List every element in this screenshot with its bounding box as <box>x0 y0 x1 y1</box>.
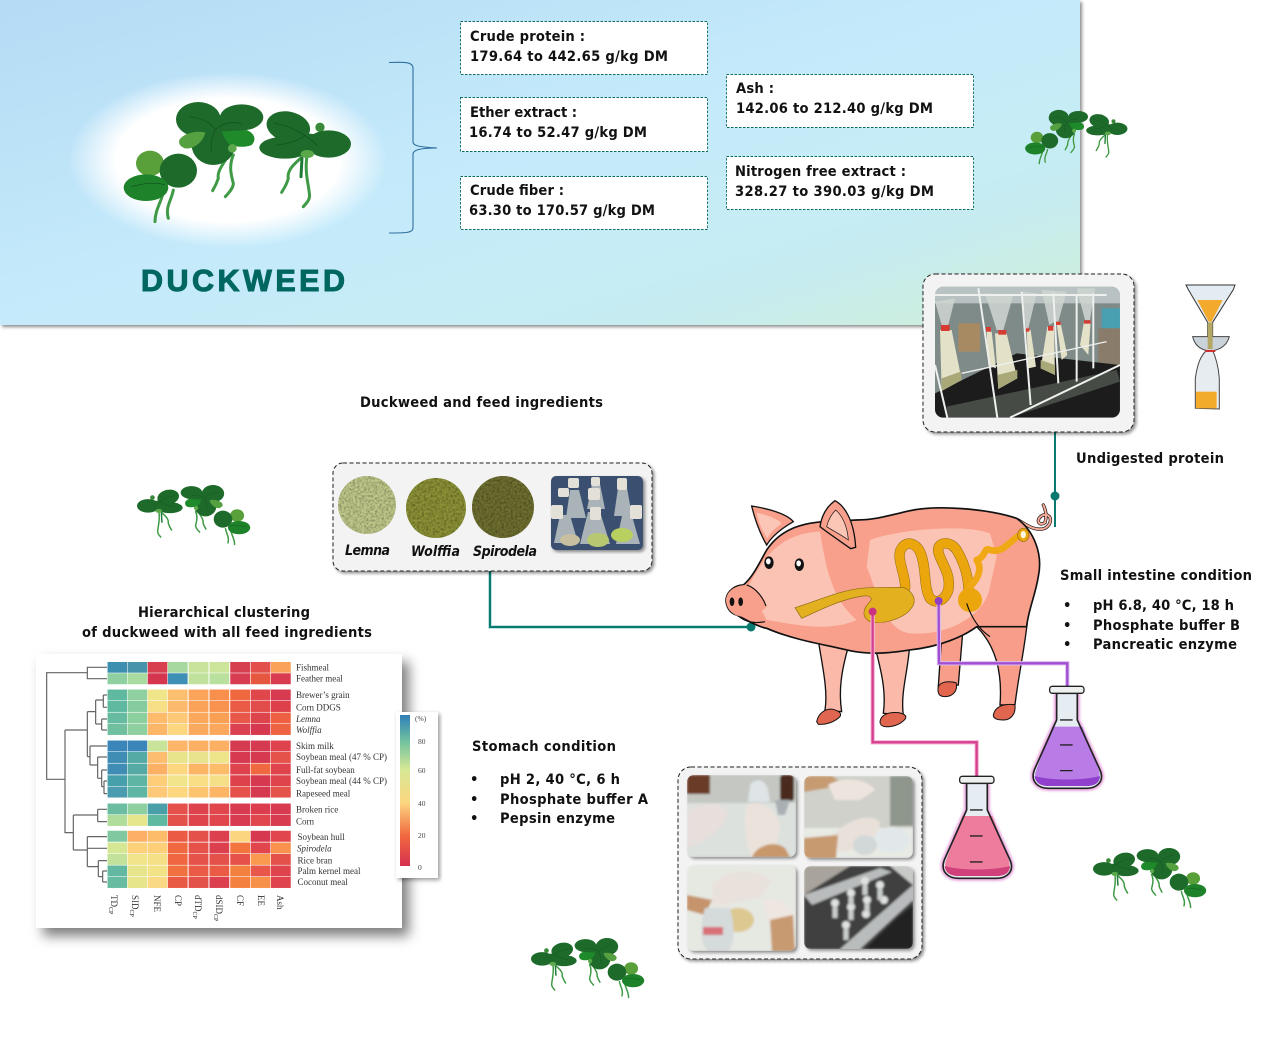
photo 4 <box>804 866 913 949</box>
heatmap column labels: dTD <box>193 895 203 912</box>
second front leg <box>875 637 910 715</box>
heatmap legend: 20 <box>418 831 426 840</box>
heatmap card <box>36 654 402 928</box>
heatmap legend <box>396 712 438 878</box>
sample: Lemna: Lemna <box>345 543 390 559</box>
connector: ingredients to pig <box>490 571 756 632</box>
heatmap legend: 0 <box>418 863 422 872</box>
stomach condition text: • <box>470 791 478 808</box>
ear right <box>820 501 856 549</box>
icon: large duckweed <box>124 102 351 222</box>
heatmap legend: (%) <box>415 714 427 723</box>
heatmap column labels: SID <box>130 895 140 910</box>
heatmap legend: 60 <box>418 766 426 775</box>
composition box: crude protein: 179.64 to 442.65 g/kg DM <box>470 48 668 65</box>
photo 1 <box>687 775 796 857</box>
photo 3 <box>687 865 796 951</box>
small intestine condition text: • <box>1063 636 1071 653</box>
stomach condition text: Stomach condition <box>472 738 616 755</box>
small intestine condition text <box>1060 567 1252 653</box>
icon: small duckweed left <box>137 485 250 545</box>
heatmap row labels: Soybean meal (44 % CP) <box>296 776 387 786</box>
heading: hierarchical clustering <box>82 604 372 641</box>
photo: nylon bags in tank <box>935 287 1120 418</box>
stomach connector to pink flask <box>869 608 977 777</box>
heatmap row labels: Feather meal <box>296 674 343 684</box>
head highlight <box>747 532 857 627</box>
heatmap column labels: dSID <box>214 895 224 914</box>
heatmap column labels <box>107 895 285 922</box>
heatmap column labels: CP <box>212 914 218 922</box>
small intestine connector to purple flask <box>935 597 1067 687</box>
heatmap row labels: Soybean hull <box>298 832 345 842</box>
composition box: ash: Ash : <box>736 80 774 97</box>
composition box: crude fiber: Crude fiber : <box>470 182 564 199</box>
connector: pig to undigested protein <box>1050 432 1060 527</box>
heatmap row labels: Palm kernel meal <box>298 866 361 876</box>
heatmap column labels: EE <box>256 895 266 906</box>
heatmap row labels: Brewer’s grain <box>296 690 350 700</box>
heatmap row labels: Rice bran <box>298 856 333 866</box>
top background panel <box>0 0 1080 325</box>
composition box: crude protein: Crude protein : <box>470 28 585 45</box>
composition box: crude fiber: 63.30 to 170.57 g/kg DM <box>469 202 655 219</box>
composition box: nitrogen free extract: Nitrogen free extract : <box>735 163 906 180</box>
stomach <box>795 587 914 623</box>
heading: hierarchical clustering: of duckweed with all feed ingredients <box>82 624 372 641</box>
composition box: nitrogen free extract <box>726 156 974 210</box>
heatmap column labels: Ash <box>275 895 285 910</box>
heatmap row labels <box>295 662 387 887</box>
duckweed title: DUCKWEED <box>141 264 345 298</box>
body <box>726 508 1040 653</box>
near rear leg <box>977 622 1027 705</box>
heatmap row labels: Rapeseed meal <box>296 789 351 799</box>
icon: funnel into nylon bag <box>1186 285 1235 409</box>
eyes <box>764 556 774 569</box>
composition box: crude protein <box>460 22 708 74</box>
heatmap column labels: CP <box>173 895 183 906</box>
heatmap row labels: Full-fat soybean <box>296 765 355 775</box>
heatmap row labels: Lemna <box>295 714 321 724</box>
heading: hierarchical clustering: Hierarchical clustering <box>138 604 310 621</box>
heatmap column labels: CP <box>107 907 113 915</box>
small intestine condition text: Pancreatic enzyme <box>1093 636 1237 653</box>
heatmap row labels: Coconut meal <box>298 877 348 887</box>
small intestine condition text: pH 6.8, 40 °C, 18 h <box>1093 597 1234 614</box>
heatmap legend: 80 <box>418 737 426 746</box>
ear left <box>752 506 793 545</box>
small intestine condition text: • <box>1063 617 1071 634</box>
photo: flasks with samples <box>551 476 643 550</box>
heatmap row labels: Soybean meal (47 % CP) <box>296 752 387 762</box>
heatmap legend: 40 <box>418 799 426 808</box>
composition box: ash <box>726 74 974 128</box>
heatmap column labels: CP <box>128 910 134 918</box>
icon: small duckweed top right <box>1025 110 1127 164</box>
composition box: ether extract: Ether extract : <box>470 104 577 121</box>
heatmap cells <box>107 662 291 888</box>
heatmap row labels: Broken rice <box>296 804 338 814</box>
heatmap row labels: Spirodela <box>297 844 332 854</box>
front leg <box>818 640 848 712</box>
undigested protein label: Undigested protein <box>1076 450 1224 467</box>
stomach condition text: • <box>470 771 478 788</box>
stomach condition text <box>470 738 649 827</box>
sample: Wolffia <box>406 478 466 560</box>
photo 2 <box>804 776 913 858</box>
heatmap row labels: Corn <box>296 817 314 827</box>
far rear leg <box>938 633 963 687</box>
small and large intestine <box>900 535 1020 603</box>
composition box: ash: 142.06 to 212.40 g/kg DM <box>736 100 933 117</box>
brace <box>389 62 437 233</box>
sample: Lemna <box>338 476 396 559</box>
dendrogram <box>47 667 107 882</box>
sample: Spirodela: Spirodela <box>473 544 537 560</box>
icon: pink flask <box>943 776 1011 878</box>
icon: purple flask <box>1033 686 1101 788</box>
composition box: ether extract: 16.74 to 52.47 g/kg DM <box>469 124 647 141</box>
heatmap row labels: Corn DDGS <box>296 702 341 712</box>
heading: duckweed and feed ingredients: Duckweed and feed ingredients <box>360 394 603 411</box>
small intestine condition text: Small intestine condition <box>1060 567 1252 584</box>
stomach condition text: pH 2, 40 °C, 6 h <box>500 771 620 788</box>
panel: in vitro lab photos <box>678 767 922 959</box>
stomach condition text: Phosphate buffer A <box>500 791 649 808</box>
stomach condition text: Pepsin enzyme <box>500 810 615 827</box>
stomach condition text: • <box>470 810 478 827</box>
white halo behind duckweed <box>68 72 388 248</box>
heatmap column labels: CP <box>191 912 197 920</box>
tail <box>1018 505 1050 529</box>
panel: duckweed samples <box>333 463 652 571</box>
body highlight <box>867 528 997 634</box>
sample: Spirodela <box>472 476 537 560</box>
icon: small duckweed bottom <box>531 938 644 998</box>
heatmap row labels: Fishmeal <box>296 662 329 672</box>
small intestine condition text: Phosphate buffer B <box>1093 617 1240 634</box>
composition box: nitrogen free extract: 328.27 to 390.03 g/kg DM <box>735 183 934 200</box>
heatmap column labels: NFE <box>152 895 162 913</box>
heatmap column labels: CF <box>235 895 245 906</box>
heatmap column labels: TD <box>109 895 119 907</box>
snout <box>726 585 767 617</box>
panel: undigested protein photo <box>923 274 1134 432</box>
sample: Wolffia: Wolffia <box>411 544 460 560</box>
small intestine condition text: • <box>1063 597 1071 614</box>
panel: pig with digestive tract <box>726 501 1050 727</box>
icon: small duckweed right <box>1093 848 1206 908</box>
composition box: crude fiber <box>460 176 708 230</box>
composition box: ether extract <box>460 98 708 152</box>
heatmap row labels: Wolffia <box>296 725 322 735</box>
heatmap row labels: Skim milk <box>296 741 334 751</box>
